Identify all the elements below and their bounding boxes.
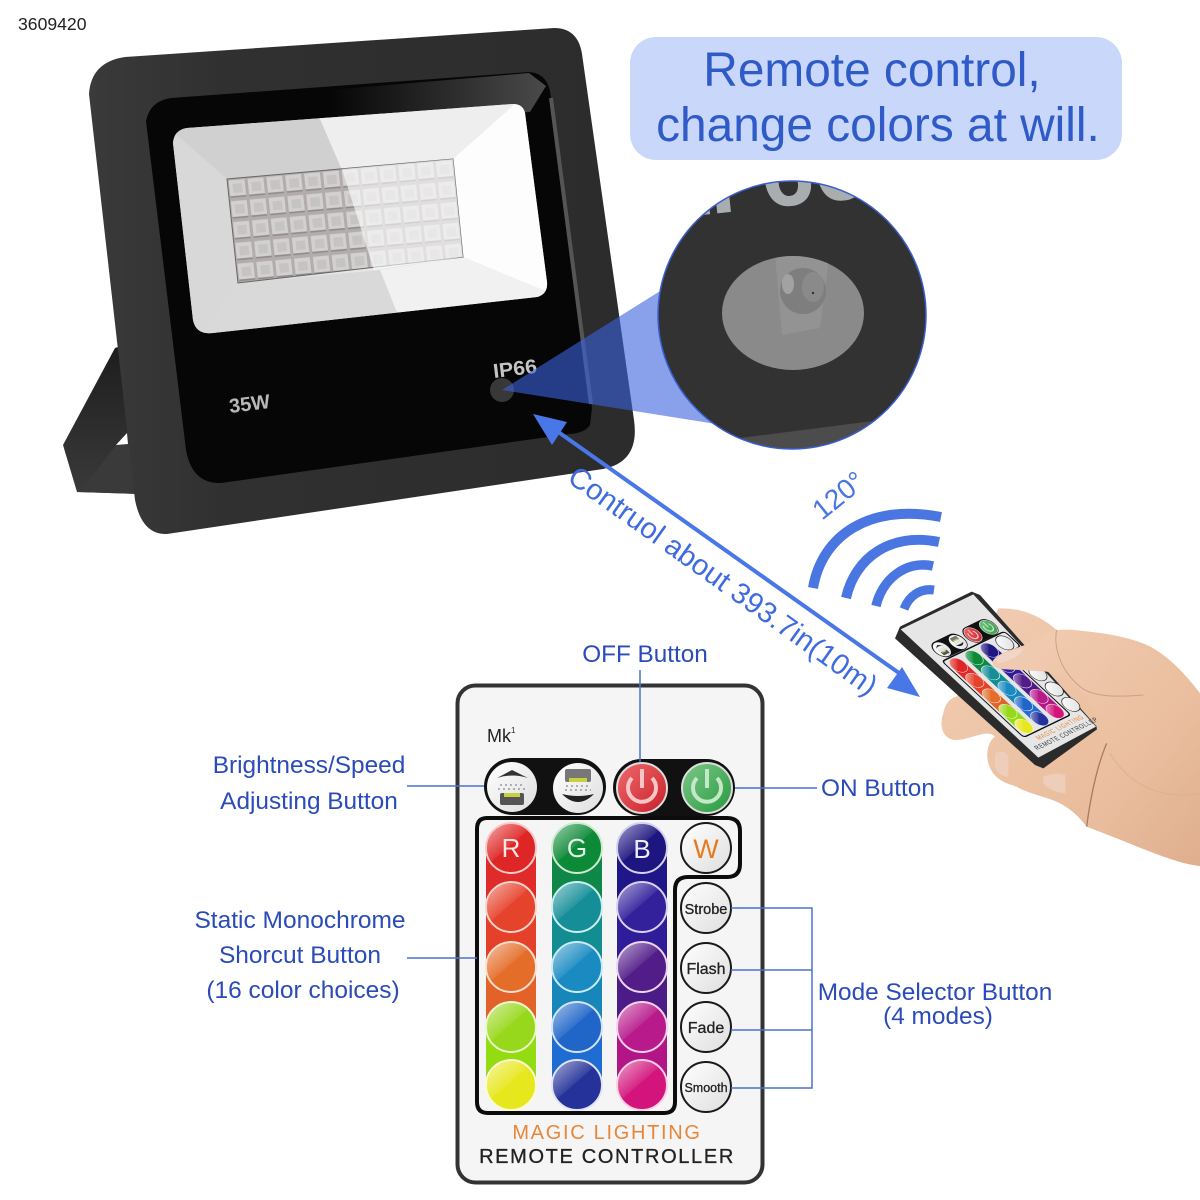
LED array — [227, 159, 463, 283]
magnifier cone — [502, 288, 716, 424]
model mark: Mk — [487, 726, 511, 746]
mini remote: MAGIC LIGHTING — [1035, 714, 1086, 742]
signal waves — [813, 514, 941, 609]
button letters — [502, 833, 728, 1095]
glass sheen — [330, 73, 546, 125]
mini remote — [895, 592, 1102, 768]
label: Mode Selector: (4 modes) — [883, 1003, 993, 1030]
finger nails — [995, 751, 1065, 793]
callout: Remote control — [630, 37, 1122, 160]
label: Mode Selector: Mode Selector Button — [818, 979, 1052, 1006]
sensor close-up: P — [702, 123, 776, 235]
label: ON Button: ON Button — [821, 775, 935, 802]
angle label: 120° — [806, 465, 871, 526]
label: Brightness/Speed: Adjusting Button — [220, 788, 398, 815]
hand back — [941, 608, 1200, 866]
button letters: W — [693, 834, 719, 864]
main remote: REMOTE CONTROLLER — [479, 1146, 735, 1168]
label: Static Monochrome: (16 color choices) — [206, 977, 400, 1004]
model mark: 1 — [511, 726, 516, 735]
label: Static Monochrome: Static Monochrome — [194, 907, 406, 934]
callout leader lines — [407, 670, 817, 1088]
button letters: Smooth — [684, 1081, 728, 1095]
hand holding remote — [895, 592, 1200, 866]
callout: Remote control: change colors at will. — [656, 99, 1100, 152]
button letters: R — [502, 833, 520, 863]
callout: Remote control: Remote control, — [703, 44, 1041, 97]
IR sensor — [490, 378, 514, 402]
buttons — [477, 758, 740, 1113]
button letters: G — [567, 833, 587, 863]
stand — [63, 340, 140, 494]
button letters: Fade — [688, 1020, 724, 1037]
outer frame — [89, 28, 635, 534]
thumb and palm — [993, 630, 1200, 866]
button letters: Flash — [686, 961, 726, 978]
remote brand text: MAGIC LIGHTING — [512, 1122, 702, 1144]
button letters: B — [633, 834, 651, 864]
sensor close-up: 66 — [755, 112, 871, 229]
label: OFF Button: OFF Button — [582, 641, 708, 668]
label: Mode Selector — [818, 979, 1052, 1030]
thumb nail — [995, 648, 1023, 663]
button letters: Strobe — [685, 902, 727, 918]
label: Static Monochrome: Shorcut Button — [219, 942, 381, 969]
label: Static Monochrome — [194, 907, 406, 1004]
sensor close-up: I — [681, 129, 719, 237]
front glass — [146, 72, 592, 483]
wattage label: 35W — [228, 391, 271, 418]
light panel — [173, 104, 548, 334]
main remote — [458, 686, 762, 1182]
mini remote: REMOTE CONTROLLER — [1033, 716, 1101, 752]
range label: Contruol about 393.7in(10m) — [562, 461, 883, 702]
glass edge highlight — [551, 98, 591, 404]
sensor close-up — [657, 180, 927, 450]
label: Brightness/Speed — [213, 752, 405, 815]
IP66 label: IP66 — [492, 356, 538, 383]
flood light — [63, 28, 635, 534]
range arrow — [533, 414, 920, 697]
product code: 3609420 — [18, 14, 87, 34]
palm creases — [1056, 630, 1200, 827]
label: Brightness/Speed: Brightness/Speed — [213, 752, 405, 779]
